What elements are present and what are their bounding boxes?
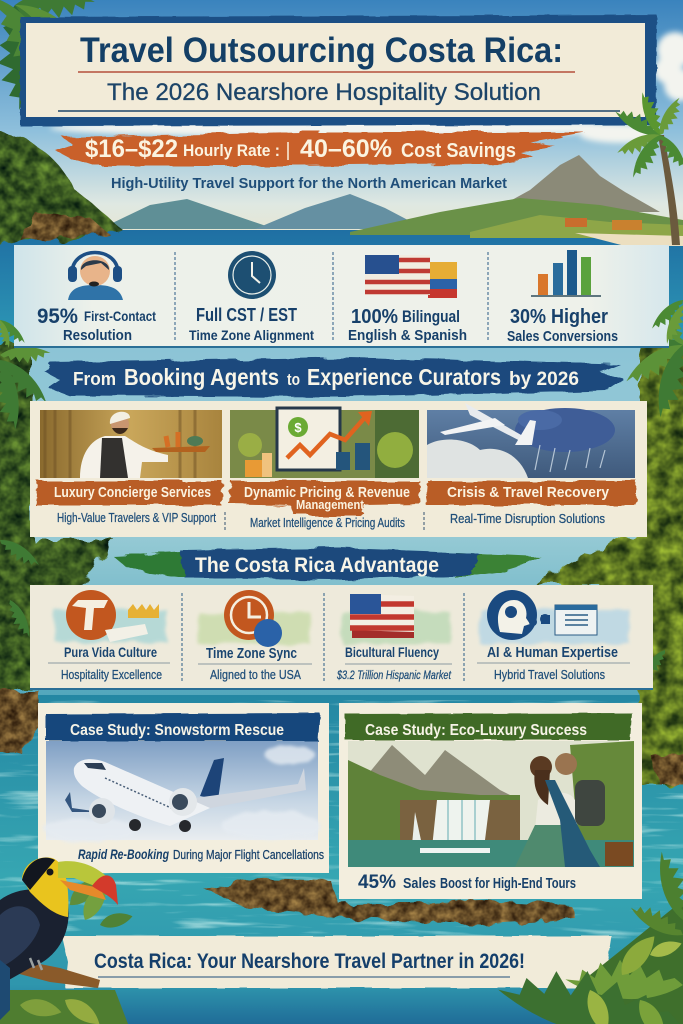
toucan on a branch	[0, 857, 118, 1020]
label band: dynamic pricing: Dynamic Pricing & Revenue	[244, 484, 410, 501]
title panel	[20, 15, 657, 126]
volcano and hills	[100, 155, 683, 246]
stat bilingual: Bilingual	[402, 307, 460, 326]
advantage captions	[61, 667, 605, 682]
service image: crisis flight	[427, 403, 635, 478]
stat bilingual: 100%	[351, 306, 398, 328]
snowstorm caption	[78, 846, 324, 862]
label band: crisis recovery	[426, 481, 637, 505]
small palms over stats panel edges	[0, 296, 683, 350]
section banner: costa rica advantage: The Costa Rica Advantage	[195, 554, 439, 577]
section banner: experience curators: to	[287, 370, 300, 389]
snowstorm caption: During Major Flight Cancellations	[173, 847, 324, 862]
advantage captions: Hybrid Travel Solutions	[494, 667, 605, 682]
section banner: experience curators: by 2026	[509, 369, 579, 390]
stat time zone	[189, 305, 314, 343]
section banner: experience curators	[45, 358, 623, 397]
eco caption: 45%	[358, 872, 396, 893]
stat 95%: 95%	[37, 305, 78, 328]
green header brush: Case Study: Eco-Luxury Success	[365, 722, 587, 739]
service image: pricing	[230, 408, 419, 478]
palm top right	[612, 89, 683, 245]
panel: key stats	[14, 245, 669, 347]
icon: time sync clock	[224, 590, 282, 647]
label band: luxury concierge	[35, 481, 223, 505]
side jungle left	[0, 345, 115, 752]
rate banner: 40–60%	[300, 135, 392, 163]
rate banner: Hourly Rate :	[183, 141, 280, 160]
rate banner	[55, 132, 585, 166]
side jungle right	[535, 345, 683, 785]
icon: clock	[228, 251, 276, 299]
eco caption	[358, 872, 576, 893]
rate banner: $16–$22	[85, 135, 178, 163]
clouds	[50, 32, 683, 143]
panel: services	[30, 401, 647, 537]
tagline: High-Utility Travel Support for the North American Market	[111, 175, 507, 192]
side palms	[0, 298, 683, 684]
advantage rules	[48, 663, 630, 664]
eco caption: Boost for High-End Tours	[440, 875, 576, 892]
stat sales	[507, 306, 618, 345]
blue header brush	[46, 713, 320, 741]
advantage captions: $3.2 Trillion Hispanic Market	[336, 668, 452, 682]
advantage headings: Pura Vida Culture	[64, 644, 157, 660]
section banner: experience curators: Experience Curators	[307, 364, 501, 390]
snowstorm illustration	[45, 741, 320, 842]
eco illustration	[348, 741, 634, 867]
subheading: The 2026 Nearshore Hospitality Solution	[107, 79, 541, 106]
color washes	[55, 610, 630, 644]
panel: advantages	[30, 585, 653, 689]
label band: dynamic pricing: Management	[296, 497, 365, 512]
stat bilingual	[348, 306, 467, 344]
icon: pura vida	[66, 590, 159, 642]
panel: case study eco-luxury	[339, 703, 642, 899]
service captions: Market Intelligence & Pricing Audits	[250, 515, 405, 530]
palm top left	[0, 0, 96, 112]
footer banner	[62, 936, 612, 988]
icon: ai head and document	[487, 590, 597, 640]
service image: concierge	[40, 410, 222, 478]
section banner: experience curators: Booking Agents	[124, 364, 279, 390]
advantage headings	[64, 644, 618, 662]
section banner: experience curators: From	[73, 369, 116, 389]
label band: luxury concierge: Luxury Concierge Services	[54, 484, 211, 501]
stat bilingual: English & Spanish	[348, 327, 467, 344]
icon: headset agent	[68, 252, 123, 300]
service captions: High-Value Travelers & VIP Support	[57, 510, 216, 525]
blue header brush: Case Study: Snowstorm Rescue	[70, 722, 284, 739]
stat sales: Sales Conversions	[507, 328, 618, 345]
panel: case study snowstorm	[38, 703, 329, 873]
stat sales: 30% Higher	[510, 306, 608, 328]
rate banner: Cost Savings	[401, 140, 516, 162]
main heading: Travel Outsourcing Costa Rica:	[80, 31, 563, 70]
advantage headings: Bicultural Fluency	[345, 644, 439, 660]
section banner: costa rica advantage	[113, 548, 540, 580]
advantage headings: Time Zone Sync	[206, 645, 297, 662]
eco caption: Sales	[403, 875, 436, 892]
stat time zone: Full CST / EST	[196, 305, 297, 325]
advantage headings: AI & Human Expertise	[487, 644, 618, 661]
foliage bottom right	[494, 848, 683, 1024]
stat time zone: Time Zone Alignment	[189, 327, 314, 343]
coastal rocks	[205, 878, 575, 924]
label band: dynamic pricing	[229, 481, 420, 516]
snowstorm caption: Rapid Re-Booking	[78, 846, 169, 862]
service image: pricing: $	[294, 420, 302, 435]
left headland jungle	[0, 128, 125, 242]
advantage captions: Aligned to the USA	[210, 667, 301, 682]
label band: crisis recovery: Crisis & Travel Recovery	[447, 484, 610, 501]
footer banner: Costa Rica: Your Nearshore Travel Partner in 2026!	[94, 950, 525, 973]
green header brush	[345, 713, 632, 740]
icon: flags	[365, 255, 457, 298]
foliage bottom left	[0, 871, 134, 1024]
stat 95%	[37, 305, 156, 344]
service captions: Real-Time Disruption Solutions	[450, 511, 605, 526]
icon: usa flag	[350, 594, 414, 638]
stat 95%: Resolution	[63, 327, 132, 344]
service captions	[57, 510, 605, 530]
travellers	[532, 792, 580, 864]
advantage captions: Hospitality Excellence	[61, 667, 162, 682]
icon: bar chart	[531, 250, 601, 296]
stat 95%: First-Contact	[84, 308, 156, 324]
